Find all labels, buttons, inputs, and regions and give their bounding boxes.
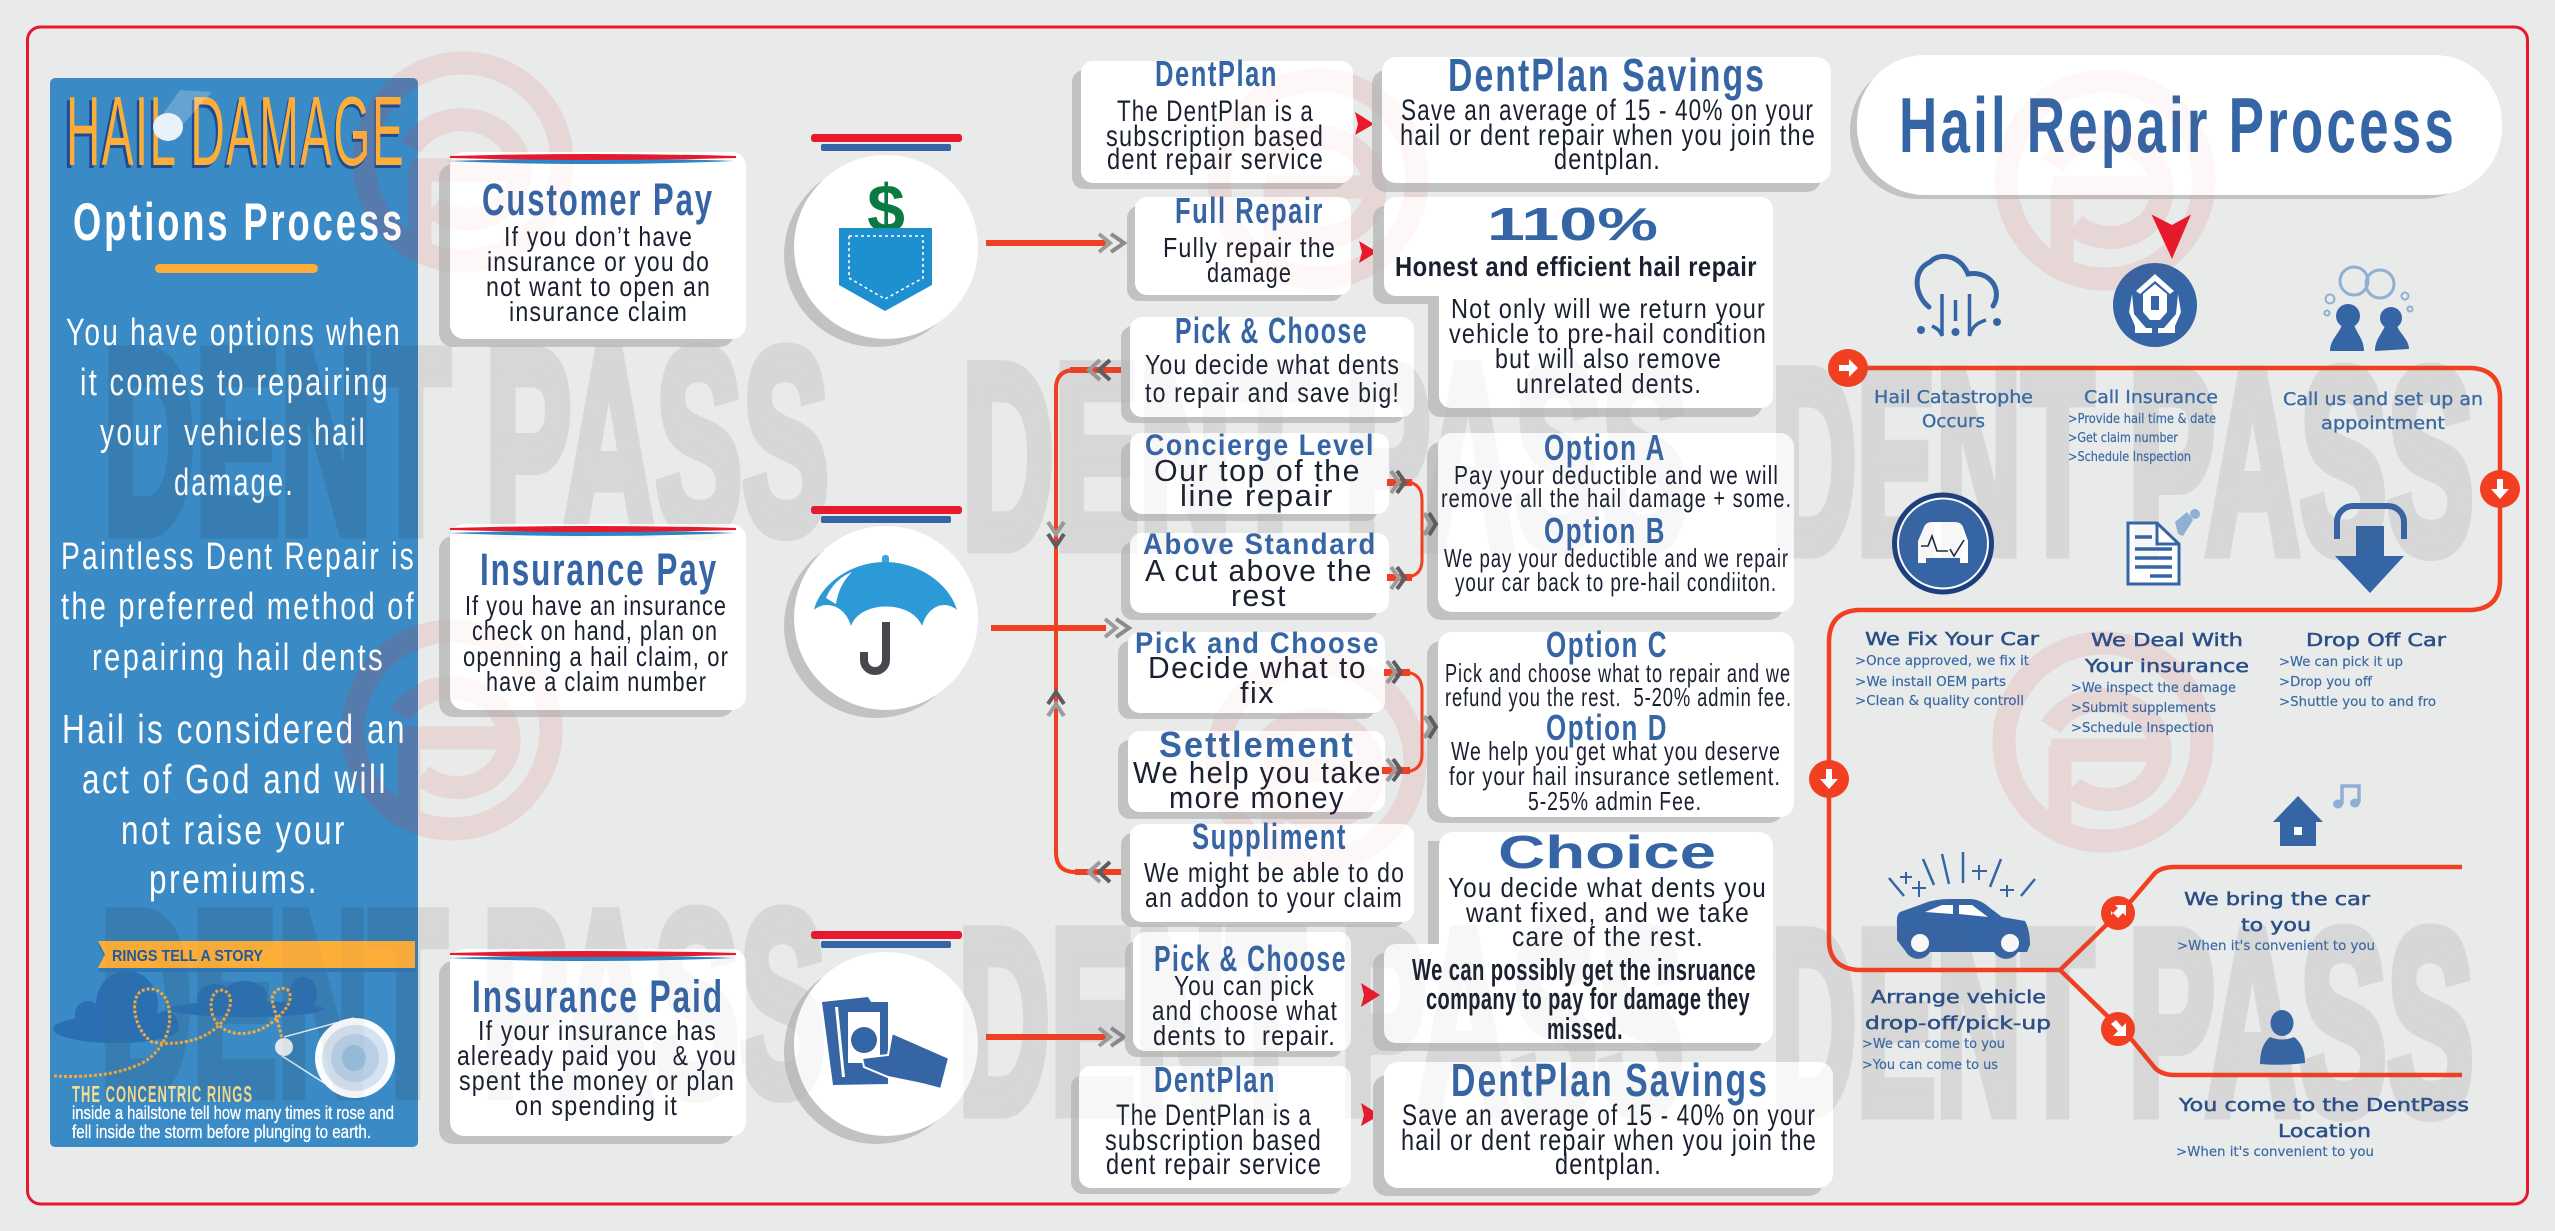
- icon: shiny car: [1889, 852, 2035, 959]
- watermark: background layer: PASS: [1340, 875, 1684, 1168]
- icon: person: [2260, 1010, 2305, 1065]
- icon: people with speech bubbles: [2324, 267, 2412, 351]
- arrow: customer pay to options: [986, 234, 1124, 252]
- step: we deal with your insurance: >Schedule Inspection: [2071, 721, 2214, 736]
- watermark: background layer: DENT: [958, 875, 1305, 1168]
- body text: [1145, 349, 1400, 408]
- body text: more money: [1169, 780, 1345, 815]
- step: we deal with your insurance: Your insurance: [2084, 656, 2249, 677]
- heading: option c: Option C: [1546, 624, 1668, 665]
- body text: dent repair service: [1107, 143, 1324, 176]
- text block: concentric rings description: fell inside the storm before plunging to earth.: [72, 1122, 371, 1142]
- watermark: overlay layer: DENT: [1771, 876, 2094, 1169]
- option c text: [1445, 658, 1792, 712]
- step: you come to dentpass: You come to the DentPass: [2178, 1095, 2469, 1116]
- body text: [1448, 872, 1767, 952]
- text block: act of god: premiums.: [149, 856, 319, 902]
- heading: DentPlan Savings: [1451, 1054, 1769, 1106]
- card: insurance company pays: [1373, 944, 1773, 1051]
- step: arrange vehicle: drop-off/pick-up: [1865, 1013, 2051, 1034]
- step: drop off car: [2279, 630, 2447, 710]
- watermark: background layer: DENT: [103, 295, 450, 588]
- card: dentplan top: [1072, 53, 1353, 189]
- arrow: start marker: [2152, 214, 2191, 259]
- step: arrange vehicle: [1862, 987, 2051, 1073]
- body text: [1412, 952, 1756, 1046]
- option b text: We pay your deductible and we repair: [1444, 543, 1789, 573]
- body text: [1133, 755, 1382, 815]
- step: drop off car: >We can pick it up: [2279, 655, 2403, 670]
- body text: If you have an insurance: [465, 590, 727, 621]
- banner: rings tell a story: RINGS TELL A STORY: [112, 948, 263, 965]
- title: hail damage: [63, 76, 405, 189]
- body text: Save an average of 15 - 40% on your: [1402, 1099, 1816, 1132]
- option d text: for your hail insurance setlement.: [1449, 761, 1781, 791]
- body text: [1154, 453, 1361, 513]
- card: settlement: [1118, 724, 1385, 819]
- panel: hail damage sidebar: [50, 78, 418, 1147]
- icon: house with music note: [2273, 786, 2360, 846]
- text block: act of god: [62, 706, 407, 902]
- watermark: overlay layer: PASS: [485, 295, 829, 588]
- panel: hail damage sidebar: DENT: [103, 295, 450, 588]
- watermark: background layer: DENT: [100, 857, 447, 1150]
- banner: rings tell a story: [98, 941, 415, 972]
- body text: check on hand, plan on: [472, 615, 718, 646]
- body text: hail or dent repair when you join the: [1400, 119, 1816, 152]
- step: call insurance: >Get claim number: [2068, 431, 2179, 446]
- watermark: overlay layer: PASS: [1340, 875, 1684, 1168]
- option d text: We help you get what you deserve: [1451, 736, 1781, 766]
- card: choice: [1428, 826, 1773, 952]
- body text: unrelated dents.: [1516, 368, 1702, 399]
- body text: care of the rest.: [1512, 921, 1704, 952]
- step: arrange vehicle: >We can come to you: [1862, 1037, 2005, 1052]
- icon: car diagnostics: [1892, 492, 1994, 594]
- step: hail catastrophe: Occurs: [1922, 411, 1985, 432]
- body text: If your insurance has: [478, 1015, 717, 1046]
- step: drop off car: >Shuttle you to and fro: [2279, 695, 2436, 710]
- arrow: dentplan to savings: [1355, 112, 1374, 135]
- body text: Not only will we return your: [1451, 293, 1766, 324]
- step: hail catastrophe: Hail Catastrophe: [1874, 387, 2033, 408]
- heading: option d: Option D: [1546, 707, 1668, 748]
- text block: paintless dent repair: the preferred method of: [61, 586, 416, 628]
- panel: insurance paid: [439, 949, 746, 1144]
- step: you come to dentpass: >When it's convenient to you: [2176, 1145, 2374, 1160]
- step: we bring the car: [2177, 889, 2375, 954]
- body text: an addon to your claim: [1145, 882, 1403, 913]
- heading: Suppliment: [1192, 816, 1347, 857]
- heading: Pick & Choose: [1175, 310, 1368, 351]
- step: you come to dentpass: [2176, 1095, 2469, 1160]
- body text: but will also remove: [1495, 343, 1722, 374]
- card: dentplan savings bottom: [1373, 1054, 1833, 1196]
- icon: insurance house in hands: [2113, 263, 2197, 347]
- body text: company to pay for damage they: [1426, 981, 1750, 1016]
- heading: Customer Pay: [482, 174, 714, 225]
- panel: hail damage sidebar: DENT: [100, 857, 447, 1150]
- text block: act of god: act of God and will: [82, 756, 388, 802]
- icon: drop off arrow: [2335, 506, 2404, 593]
- body text: not want to open an: [486, 271, 711, 302]
- marker: down arrow left: [1809, 760, 1849, 798]
- option c text: Pick and choose what to repair and we: [1445, 658, 1791, 688]
- watermark: background layer: DENT: [1771, 315, 2094, 608]
- card: dentplan savings top: [1372, 49, 1831, 192]
- arrow: pick and choose to insurance: [1361, 983, 1380, 1007]
- body text: [1401, 1099, 1817, 1181]
- watermark: logos overlay layer: [353, 63, 2204, 861]
- body text: [1144, 857, 1405, 913]
- body text: dent repair service: [1106, 1148, 1322, 1181]
- arrow: dentplan to savings bottom: [1361, 1103, 1380, 1126]
- panel: hail damage sidebar: HAIL DAMAGE: [63, 79, 404, 189]
- step: call insurance: Call Insurance: [2084, 387, 2218, 408]
- body text: missed.: [1547, 1011, 1623, 1046]
- step: we fix your car: >We install OEM parts: [1855, 675, 2006, 690]
- body text: A cut above the: [1145, 553, 1373, 588]
- heading: Insurance Paid: [472, 971, 724, 1022]
- heading: DentPlan: [1154, 1059, 1276, 1100]
- step: call insurance: >Provide hail time & date: [2068, 412, 2216, 427]
- body text: You decide what dents you: [1448, 872, 1767, 903]
- step: call insurance: >Schedule Inspection: [2068, 450, 2191, 465]
- icon: hail cloud: [1917, 256, 2001, 336]
- connector: vertical bracket with arrows: [1048, 360, 1136, 882]
- body text: spent the money or plan: [459, 1065, 735, 1096]
- option d text: 5-25% admin Fee.: [1528, 786, 1702, 816]
- body text: We help you take: [1133, 755, 1382, 790]
- watermark: overlay layer: DENT: [103, 295, 450, 588]
- body text: hail or dent repair when you join the: [1401, 1124, 1817, 1157]
- icon: dollar pocket circle: [784, 134, 978, 347]
- body text: We can possibly get the insruance: [1412, 952, 1756, 987]
- step: we fix your car: >Once approved, we fix it: [1855, 654, 2029, 669]
- body text: [1106, 95, 1324, 176]
- watermark: overlay layer: DENT: [958, 875, 1305, 1168]
- illustration: storm clouds and hailstone path: [53, 971, 395, 1098]
- step: arrange vehicle: Arrange vehicle: [1871, 987, 2046, 1008]
- body text: insurance or you do: [487, 246, 710, 277]
- body text: Our top of the: [1154, 453, 1361, 488]
- step: we deal with your insurance: [2071, 630, 2249, 736]
- orange divider bar: [155, 264, 318, 273]
- icon: cash in hand circle: [784, 931, 978, 1144]
- card: dentplan bottom: [1071, 1059, 1351, 1194]
- text block: act of god: Hail is considered an: [62, 706, 407, 752]
- watermark: logos background layer: [353, 63, 2204, 861]
- body text: [1145, 553, 1373, 613]
- text block: act of god: not raise your: [121, 807, 347, 853]
- panel: insurance pay: [439, 524, 746, 717]
- title pill: hail repair process: [1850, 55, 2502, 199]
- watermark: overlay layer: DENT: [1771, 315, 2094, 608]
- watermark: background layer: [100, 295, 2474, 1169]
- card: full repair: [1127, 190, 1351, 301]
- heading: Insurance Pay: [480, 544, 718, 595]
- marker: down arrow right: [2480, 470, 2520, 508]
- text block: options intro: it comes to repairing: [80, 362, 390, 404]
- process path line: [1829, 368, 2500, 1075]
- icon: falling hailstone: [153, 90, 212, 141]
- body text: rest: [1231, 578, 1287, 613]
- card: 110 percent: [1373, 197, 1773, 417]
- body text: aleready paid you & you: [457, 1040, 737, 1071]
- body text: want fixed, and we take: [1465, 897, 1750, 928]
- watermark: background layer: PASS: [485, 295, 829, 588]
- connector: levels to options a b: [1387, 471, 1436, 589]
- step: we fix your car: We Fix Your Car: [1865, 629, 2040, 650]
- heading: Full Repair: [1175, 190, 1324, 231]
- watermark: background layer: PASS: [482, 857, 826, 1150]
- icon: document and stamp: [2128, 509, 2200, 584]
- heading: Choice: [1498, 826, 1716, 878]
- heading: Above Standard: [1143, 528, 1377, 561]
- heading: the concentric rings: THE CONCENTRIC RINGS: [72, 1081, 253, 1107]
- body text: vehicle to pre-hail condition: [1449, 318, 1767, 349]
- icon: dollar pocket circle: $: [867, 171, 905, 247]
- body text: openning a hail claim, or: [463, 641, 729, 672]
- step: you come to dentpass: Location: [2278, 1121, 2371, 1142]
- step: call us: Call us and set up an: [2283, 389, 2483, 410]
- step: we fix your car: >Clean & quality controll: [1855, 694, 2024, 709]
- body text: Fully repair the: [1163, 232, 1336, 263]
- marker: start arrow: [1828, 349, 1868, 387]
- text block: paintless dent repair: Paintless Dent Repair is: [61, 536, 416, 578]
- body text: You decide what dents: [1145, 349, 1400, 380]
- body text: [463, 590, 729, 697]
- body text: and choose what: [1152, 995, 1338, 1026]
- step: hail catastrophe: [1874, 387, 2033, 432]
- body text: subscription based: [1105, 1124, 1322, 1157]
- marker: branch down arrow: [2101, 1012, 2135, 1046]
- option c text: refund you the rest. 5-20% admin fee.: [1445, 682, 1792, 712]
- watermark: background layer: DENT: [1771, 876, 2094, 1169]
- body text: We might be able to do: [1144, 857, 1405, 888]
- watermark: overlay layer: [100, 295, 2474, 1169]
- icon: umbrella circle: [784, 506, 978, 718]
- heading: Concierge Level: [1145, 429, 1375, 462]
- step: call insurance: [2068, 387, 2218, 465]
- step: we deal with your insurance: >Submit supplements: [2071, 701, 2216, 716]
- text block: paintless dent repair: [61, 536, 416, 679]
- body text: dents to repair.: [1153, 1020, 1336, 1051]
- marker: branch up arrow: [2101, 896, 2135, 930]
- body text: [1152, 970, 1338, 1051]
- step: call us: [2283, 389, 2483, 434]
- step: call us: appointment: [2321, 413, 2445, 434]
- watermark: overlay layer: DENT: [962, 310, 1309, 603]
- watermark: background layer: PASS: [1344, 310, 1688, 603]
- body text: The DentPlan is a: [1116, 1099, 1312, 1132]
- body text: to repair and save big!: [1145, 377, 1400, 408]
- arrow: full repair to 110 percent: [1359, 241, 1377, 263]
- heading: option a: Option A: [1544, 427, 1666, 468]
- option a text: remove all the hail damage + some.: [1441, 483, 1792, 513]
- body text: The DentPlan is a: [1117, 95, 1314, 128]
- body text: [1449, 293, 1767, 399]
- card: pick and choose insurance paid: [1125, 932, 1351, 1057]
- body text: [1105, 1099, 1322, 1181]
- body text: insurance claim: [509, 296, 688, 327]
- step: we fix your car: [1855, 629, 2040, 709]
- card: options a and b: [1427, 427, 1794, 620]
- step: drop off car: Drop Off Car: [2306, 630, 2447, 651]
- step: we deal with your insurance: We Deal With: [2091, 630, 2243, 651]
- connector: levels to options c d: [1382, 661, 1436, 781]
- watermark: overlay layer: PASS: [482, 857, 826, 1150]
- card: above standard: [1121, 528, 1389, 620]
- heading: 110%: [1487, 198, 1658, 250]
- step: we bring the car: We bring the car: [2184, 889, 2371, 910]
- heading: DentPlan Savings: [1448, 49, 1766, 101]
- text block: options intro: your vehicles hail: [100, 412, 367, 454]
- panel: customer pay: [439, 152, 746, 347]
- text block: concentric rings description: [72, 1103, 394, 1142]
- body text: on spending it: [515, 1090, 678, 1121]
- body text: If you don’t have: [504, 221, 693, 252]
- body text: have a claim number: [486, 666, 707, 697]
- arrow: insurance pay to options: [991, 619, 1129, 637]
- card: concierge level: [1121, 429, 1389, 521]
- watermark: overlay layer: PASS: [1344, 310, 1688, 603]
- body text: line repair: [1180, 478, 1334, 513]
- watermark: overlay layer: DENT: [100, 857, 447, 1150]
- heading: option b: Option B: [1544, 510, 1666, 551]
- subtitle: options process: Options Process: [73, 193, 405, 252]
- arrow: insurance paid to options: [986, 1028, 1124, 1046]
- heading: Pick and Choose: [1135, 627, 1380, 660]
- body text: [1148, 650, 1367, 710]
- subheading: Honest and efficient hail repair: [1395, 251, 1757, 282]
- option b text: [1444, 543, 1789, 597]
- step: we bring the car: to you: [2241, 915, 2311, 936]
- card: pick and choose save big: [1121, 310, 1414, 423]
- heading: Settlement: [1159, 724, 1355, 765]
- card: options c and d: [1427, 624, 1794, 823]
- option a text: [1441, 460, 1792, 513]
- body text: Save an average of 15 - 40% on your: [1401, 94, 1814, 127]
- body text: [457, 1015, 737, 1121]
- step: arrange vehicle: >You can come to us: [1862, 1058, 1998, 1073]
- step: we bring the car: >When it's convenient to you: [2177, 939, 2375, 954]
- card: suppliment: [1121, 816, 1414, 927]
- option d text: [1449, 736, 1781, 816]
- body text: [1400, 94, 1816, 176]
- step: drop off car: >Drop you off: [2279, 675, 2373, 690]
- panel: hail damage sidebar: HAIL DAMAGE: [66, 76, 405, 186]
- option a text: Pay your deductible and we will: [1454, 460, 1779, 490]
- text block: concentric rings description: inside a hailstone tell how many times it rose and: [72, 1103, 394, 1123]
- text block: options intro: [66, 312, 402, 504]
- text block: options intro: You have options when: [66, 312, 402, 354]
- body text: subscription based: [1106, 120, 1324, 153]
- step: we deal with your insurance: >We inspect the damage: [2071, 681, 2236, 696]
- body text: dentplan.: [1554, 143, 1661, 176]
- body text: You can pick: [1174, 970, 1315, 1001]
- heading: DentPlan: [1155, 53, 1278, 94]
- option b text: your car back to pre-hail condiiton.: [1455, 567, 1777, 597]
- heading: Pick & Choose: [1154, 938, 1347, 979]
- text block: options intro: damage.: [174, 462, 295, 504]
- card: pick and choose decide: [1118, 627, 1385, 719]
- text block: paintless dent repair: repairing hail dents: [92, 637, 385, 679]
- body text: [486, 221, 711, 327]
- body text: fix: [1240, 675, 1275, 710]
- body text: Decide what to: [1148, 650, 1367, 685]
- body text: dentplan.: [1555, 1148, 1662, 1181]
- watermark: background layer: DENT: [962, 310, 1309, 603]
- body text: [1163, 232, 1336, 288]
- body text: damage: [1207, 257, 1292, 288]
